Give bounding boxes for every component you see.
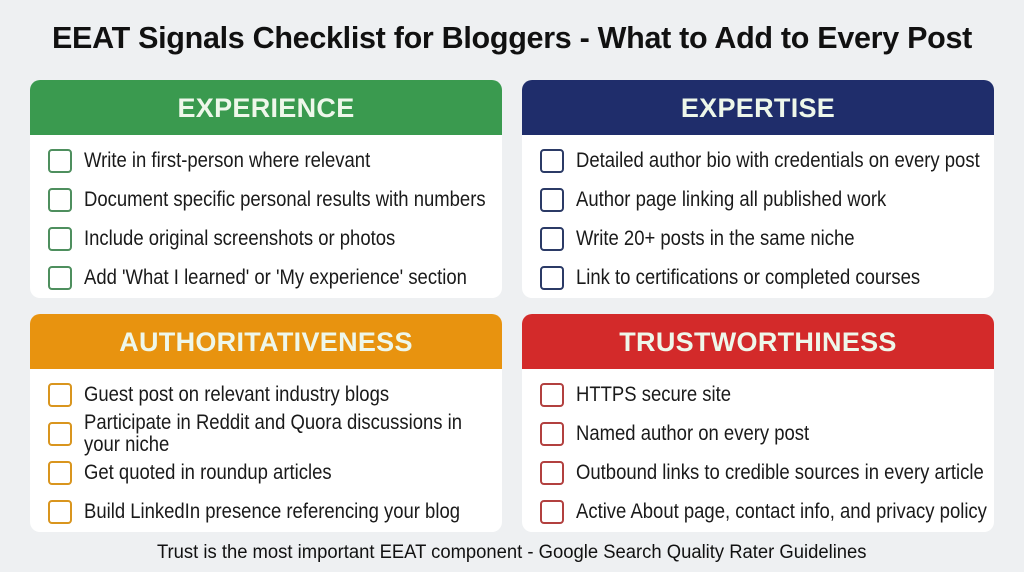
panel: authoritativeness: Participate in Reddit and Quora discussions in: [84, 411, 462, 434]
item: [540, 188, 886, 212]
item: [48, 188, 486, 212]
panel: expertise: Write 20+ posts in the same niche: [576, 227, 855, 250]
item: [540, 266, 920, 290]
panel: experience: Include original screenshots or photos: [84, 227, 395, 250]
panel: trustworthiness: HTTPS secure site: [576, 383, 731, 406]
item: [48, 500, 460, 524]
panel: trustworthiness: Named author on every post: [576, 422, 809, 445]
panel: expertise: [522, 80, 994, 298]
panel: authoritativeness: Guest post on relevant industry blogs: [84, 383, 389, 406]
panel: experience: [30, 80, 502, 298]
item: [540, 422, 809, 446]
item: [540, 149, 980, 173]
item: [48, 227, 395, 251]
heading: experience: EXPERIENCE: [177, 93, 355, 123]
footer: Trust is the most important EEAT component - Google Search Quality Rater Guidelines: [157, 542, 867, 563]
panel: authoritativeness: [30, 314, 502, 532]
panel: trustworthiness: Outbound links to credible sources in every article: [576, 461, 984, 484]
panel: trustworthiness: [522, 314, 994, 532]
title: EEAT Signals Checklist for Bloggers - What to Add to Every Post: [52, 21, 972, 55]
panel: authoritativeness: Get quoted in roundup articles: [84, 461, 332, 484]
panel: authoritativeness: Build LinkedIn presence referencing your blog: [84, 500, 460, 523]
panel: experience: Document specific personal results with numbers: [84, 188, 486, 211]
item: [540, 383, 731, 407]
panel: experience: Write in first-person where relevant: [84, 149, 370, 172]
item: [540, 461, 984, 485]
item: [48, 149, 370, 173]
heading: trustworthiness: TRUSTWORTHINESS: [619, 327, 897, 357]
item: [540, 500, 987, 524]
item: [48, 383, 389, 407]
heading: authoritativeness: AUTHORITATIVENESS: [119, 327, 413, 357]
panel: expertise: Author page linking all published work: [576, 188, 886, 211]
heading: expertise: [522, 80, 994, 135]
item: [48, 266, 467, 290]
panel: experience: Add 'What I learned' or 'My experience' section: [84, 266, 467, 289]
item: [540, 227, 855, 251]
heading: trustworthiness: [522, 314, 994, 369]
heading: experience: [30, 80, 502, 135]
heading: authoritativeness: [30, 314, 502, 369]
panel: authoritativeness: your niche: [84, 433, 169, 456]
item: [48, 461, 332, 485]
item: [48, 411, 462, 456]
panel: expertise: Link to certifications or completed courses: [576, 266, 920, 289]
panel: expertise: Detailed author bio with credentials on every post: [576, 149, 980, 172]
heading: expertise: EXPERTISE: [681, 93, 835, 123]
panel: trustworthiness: Active About page, contact info, and privacy policy: [576, 500, 987, 523]
